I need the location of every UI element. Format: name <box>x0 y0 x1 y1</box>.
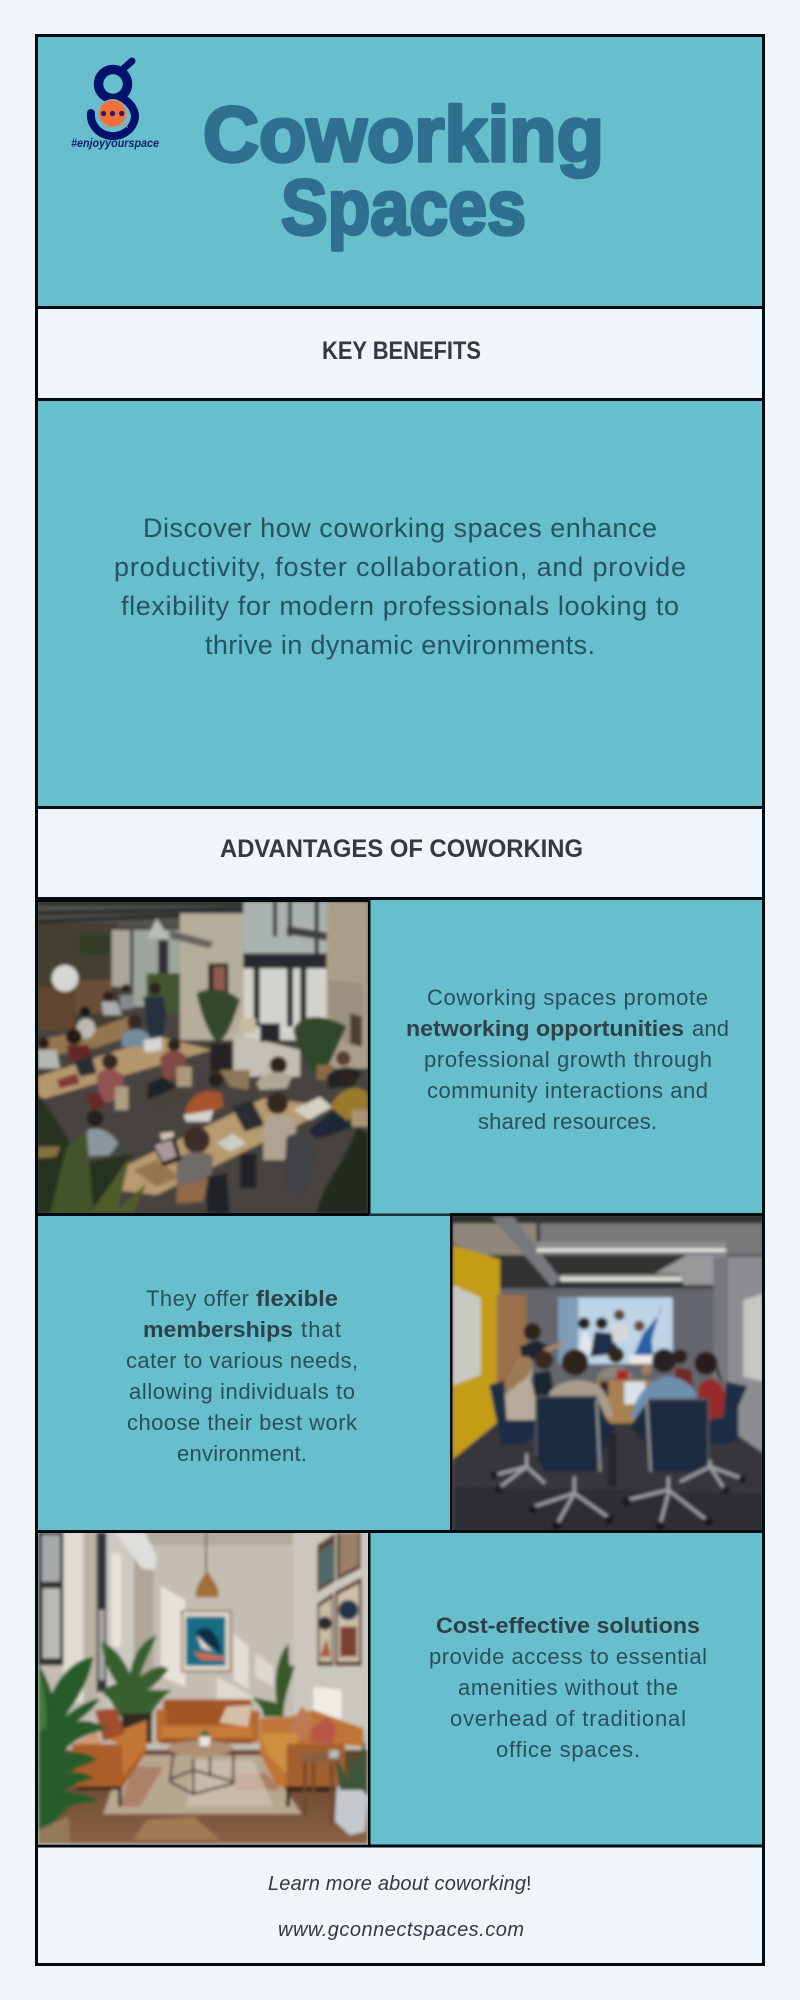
heading: advantages of coworking: ADVANTAGES OF COWORKING <box>220 835 583 863</box>
right sofa <box>260 1710 363 1787</box>
heading: key benefits: KEY BENEFITS <box>322 337 481 365</box>
panel: flexible memberships text <box>36 1215 451 1531</box>
people <box>524 1323 541 1340</box>
panel: advantages heading <box>36 808 764 898</box>
text block: cost-effective solutions: provide access to essential <box>429 1644 707 1669</box>
text block: networking opportunities: and <box>692 1016 729 1041</box>
text block: networking opportunities: professional growth through <box>424 1047 712 1072</box>
photo: lounge with orange sofas <box>37 1530 370 1847</box>
chairs <box>489 1381 537 1445</box>
logo: gconnect spaces <box>71 61 159 150</box>
panel: introduction <box>36 400 764 807</box>
text block: flexible memberships: flexible <box>256 1286 338 1311</box>
right plant <box>252 1643 295 1717</box>
text block: flexible memberships: environment. <box>177 1441 307 1466</box>
logo: gconnect spaces: #enjoyyourspace <box>71 136 159 150</box>
foreground plants <box>38 1093 133 1213</box>
foreground plant <box>38 1657 108 1833</box>
title <box>203 90 604 251</box>
text block: networking opportunities: shared resources. <box>478 1109 657 1134</box>
back sofa <box>163 1699 252 1728</box>
text block: introduction: flexibility for modern professionals looking to <box>121 591 679 621</box>
text block: introduction: thrive in dynamic environments. <box>205 630 595 660</box>
panel: cost-effective text <box>370 1532 764 1846</box>
text block: networking opportunities: Coworking spaces promote <box>427 985 708 1010</box>
text block: cost-effective solutions: office spaces. <box>496 1737 640 1762</box>
center plant <box>100 1635 172 1717</box>
photo: meeting room <box>450 1213 765 1533</box>
panel: title header <box>36 35 764 307</box>
title: Spaces <box>281 163 526 251</box>
text block: introduction: Discover how coworking spaces enhance <box>143 513 657 543</box>
text block: learn more: ! <box>526 1873 532 1895</box>
photo: open coworking floor <box>33 897 373 1217</box>
text block: cost-effective solutions <box>429 1613 707 1762</box>
panel: networking text <box>370 899 764 1215</box>
text block: cost-effective solutions: overhead of traditional <box>450 1706 686 1731</box>
text block: networking opportunities: community interactions and <box>427 1078 708 1103</box>
text block: flexible memberships: memberships <box>143 1317 293 1342</box>
text block: flexible memberships: that <box>301 1317 341 1342</box>
coffee table <box>170 1753 233 1794</box>
text block: flexible memberships: allowing individuals to <box>129 1379 355 1404</box>
people back row <box>149 982 161 994</box>
text block: introduction <box>114 513 686 660</box>
left sofa <box>70 1741 148 1789</box>
text block: flexible memberships <box>126 1286 358 1466</box>
text block: cost-effective solutions: amenities without the <box>458 1675 678 1700</box>
text block: learn more: Learn more about coworking <box>268 1873 526 1895</box>
panel: footer <box>36 1846 764 1964</box>
text block: website: www.gconnectspaces.com <box>278 1919 524 1941</box>
title: Coworking <box>203 90 604 178</box>
text block: networking opportunities: networking opportunities <box>406 1016 684 1041</box>
text block: introduction: productivity, foster collaboration, and provide <box>114 552 686 582</box>
text block: flexible memberships: They offer <box>146 1286 249 1311</box>
floor <box>38 1750 368 1844</box>
text block: networking opportunities <box>406 985 729 1134</box>
text block: flexible memberships: choose their best work <box>127 1410 358 1435</box>
side table <box>305 1762 332 1825</box>
text block: flexible memberships: cater to various needs, <box>126 1348 358 1373</box>
text block: cost-effective solutions: Cost-effective solutions <box>436 1613 700 1638</box>
panel: key benefits heading <box>36 307 764 399</box>
people front row <box>209 1073 223 1087</box>
